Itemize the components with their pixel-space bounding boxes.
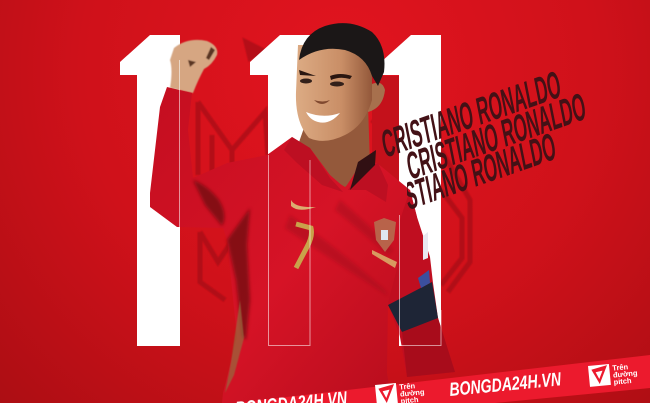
digit one, right: [381, 35, 441, 346]
ribbon shape: [235, 355, 650, 403]
crest watermark: [198, 42, 470, 300]
right arm sleeve: [388, 190, 441, 364]
ear: [368, 83, 385, 112]
name text: Cristiano Ronaldo repeated: [382, 72, 585, 209]
player: [150, 23, 455, 403]
translucent outlines of the digits over the player: [180, 60, 441, 346]
number 111: [120, 35, 441, 346]
neck: [298, 105, 370, 187]
sleeve shading: [193, 180, 250, 340]
digit one, middle: [250, 35, 310, 346]
logo: tren duong pitch, centre: Trên: [399, 381, 416, 392]
portugal crest: [372, 218, 397, 268]
nose shadow: [314, 100, 330, 104]
logo: tren duong pitch, right: đường: [613, 368, 638, 380]
brand: bongda24h, centre: BONGDA24H.VN: [448, 369, 563, 401]
logo: tren duong pitch, right: Trên: [612, 362, 629, 373]
dark red panel behind head: [372, 76, 399, 215]
fold shadows: [285, 200, 393, 296]
logo: tren duong pitch, centre: đường: [400, 387, 425, 399]
bottom ribbon: [234, 355, 650, 403]
eyes and brows: [299, 70, 352, 80]
logo: tren duong pitch, centre: [375, 383, 424, 403]
jersey body and left arm: [150, 87, 417, 403]
lower sleeve shadow: [402, 318, 455, 377]
collar: [284, 137, 388, 202]
logo: tren duong pitch, right: pitch: [613, 376, 632, 387]
hair: [299, 23, 384, 86]
captain armband: [388, 282, 438, 332]
face: [296, 45, 372, 141]
swoosh logo: [291, 200, 316, 210]
head: [296, 23, 385, 141]
digit one, left: [120, 35, 180, 346]
logo: tren duong pitch, right: [588, 364, 638, 387]
sleeve patch: [423, 232, 428, 260]
smile: [306, 112, 340, 123]
side stripe: [225, 300, 244, 393]
raised fist: [170, 40, 217, 93]
shirt number 7: [296, 224, 312, 268]
